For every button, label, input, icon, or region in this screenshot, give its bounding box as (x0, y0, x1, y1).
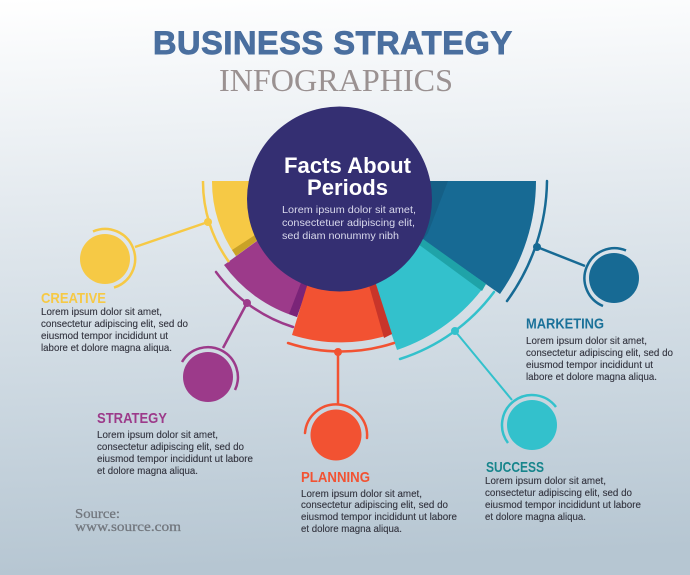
outer arc: planning (288, 343, 394, 405)
text block: planning: eiusmod tempor incididunt ut labore (301, 512, 457, 523)
text block: marketing: MARKETING (526, 316, 604, 332)
text block: marketing: consectetur adipiscing elit, sed do (526, 348, 673, 359)
text block: planning: et dolore magna aliqua. (301, 524, 402, 535)
node: creative (80, 229, 135, 288)
outer arc: strategy (216, 272, 293, 348)
text block: creative (41, 290, 188, 354)
text block: planning: Lorem ipsum dolor sit amet, (301, 489, 422, 500)
segment: marketing (339, 181, 536, 294)
text block: success (485, 459, 641, 523)
text block: creative: consectetur adipiscing elit, sed do (41, 319, 188, 330)
text block: marketing: eiusmod tempor incididunt ut (526, 360, 653, 371)
text block: strategy: STRATEGY (97, 410, 167, 427)
text block: strategy: eiusmod tempor incididunt ut labore (97, 454, 253, 465)
source note (75, 507, 181, 535)
text block: creative: CREATIVE (41, 290, 106, 307)
text block: planning (301, 469, 457, 535)
text block: planning: consectetur adipiscing elit, sed do (301, 500, 448, 511)
text block: planning: PLANNING (301, 469, 370, 486)
text block: strategy: et dolore magna aliqua. (97, 466, 198, 477)
text block: creative: labore et dolore magna aliqua. (41, 343, 172, 354)
text block: success: eiusmod tempor incididunt ut labore (485, 500, 641, 511)
text block: success: Lorem ipsum dolor sit amet, (485, 476, 606, 487)
center circle: Lorem ipsum dolor sit amet, (282, 205, 416, 216)
text block: strategy: Lorem ipsum dolor sit amet, (97, 430, 218, 441)
node: strategy (182, 347, 238, 402)
text block: success: SUCCESS (486, 459, 544, 476)
outer arc: creative (135, 181, 229, 262)
segment: success (339, 181, 486, 350)
center circle: Periods (307, 175, 388, 200)
node: success (502, 395, 557, 450)
center circle: consectetuer adipiscing elit, (282, 218, 415, 229)
text block: marketing (526, 316, 673, 383)
outer arc: success (400, 292, 512, 400)
center circle (247, 106, 432, 292)
semicircle chart (212, 181, 536, 350)
text block: creative: eiusmod tempor incididunt ut (41, 331, 168, 342)
text block: marketing: Lorem ipsum dolor sit amet, (526, 336, 647, 347)
outer arc: marketing (507, 181, 585, 301)
segment: creative (212, 181, 339, 256)
text block: strategy: consectetur adipiscing elit, sed do (97, 442, 244, 453)
text block: success: et dolore magna aliqua. (485, 512, 586, 523)
title: INFOGRAPHICS (219, 62, 453, 98)
center circle: sed diam nonummy nibh (282, 231, 399, 242)
text block: creative: Lorem ipsum dolor sit amet, (41, 307, 162, 318)
source note: Source: (75, 507, 120, 522)
text block: strategy (97, 410, 253, 477)
node: planning (305, 404, 367, 460)
text block: success: consectetur adipiscing elit, sed do (485, 488, 632, 499)
title (153, 25, 512, 98)
source note: www.source.com (75, 520, 181, 535)
title: BUSINESS STRATEGY (153, 25, 512, 61)
node: marketing (584, 248, 639, 306)
text block: marketing: labore et dolore magna aliqua. (526, 372, 657, 383)
center circle: Facts About (284, 153, 412, 178)
segment: planning (292, 181, 392, 342)
segment: strategy (224, 181, 339, 317)
